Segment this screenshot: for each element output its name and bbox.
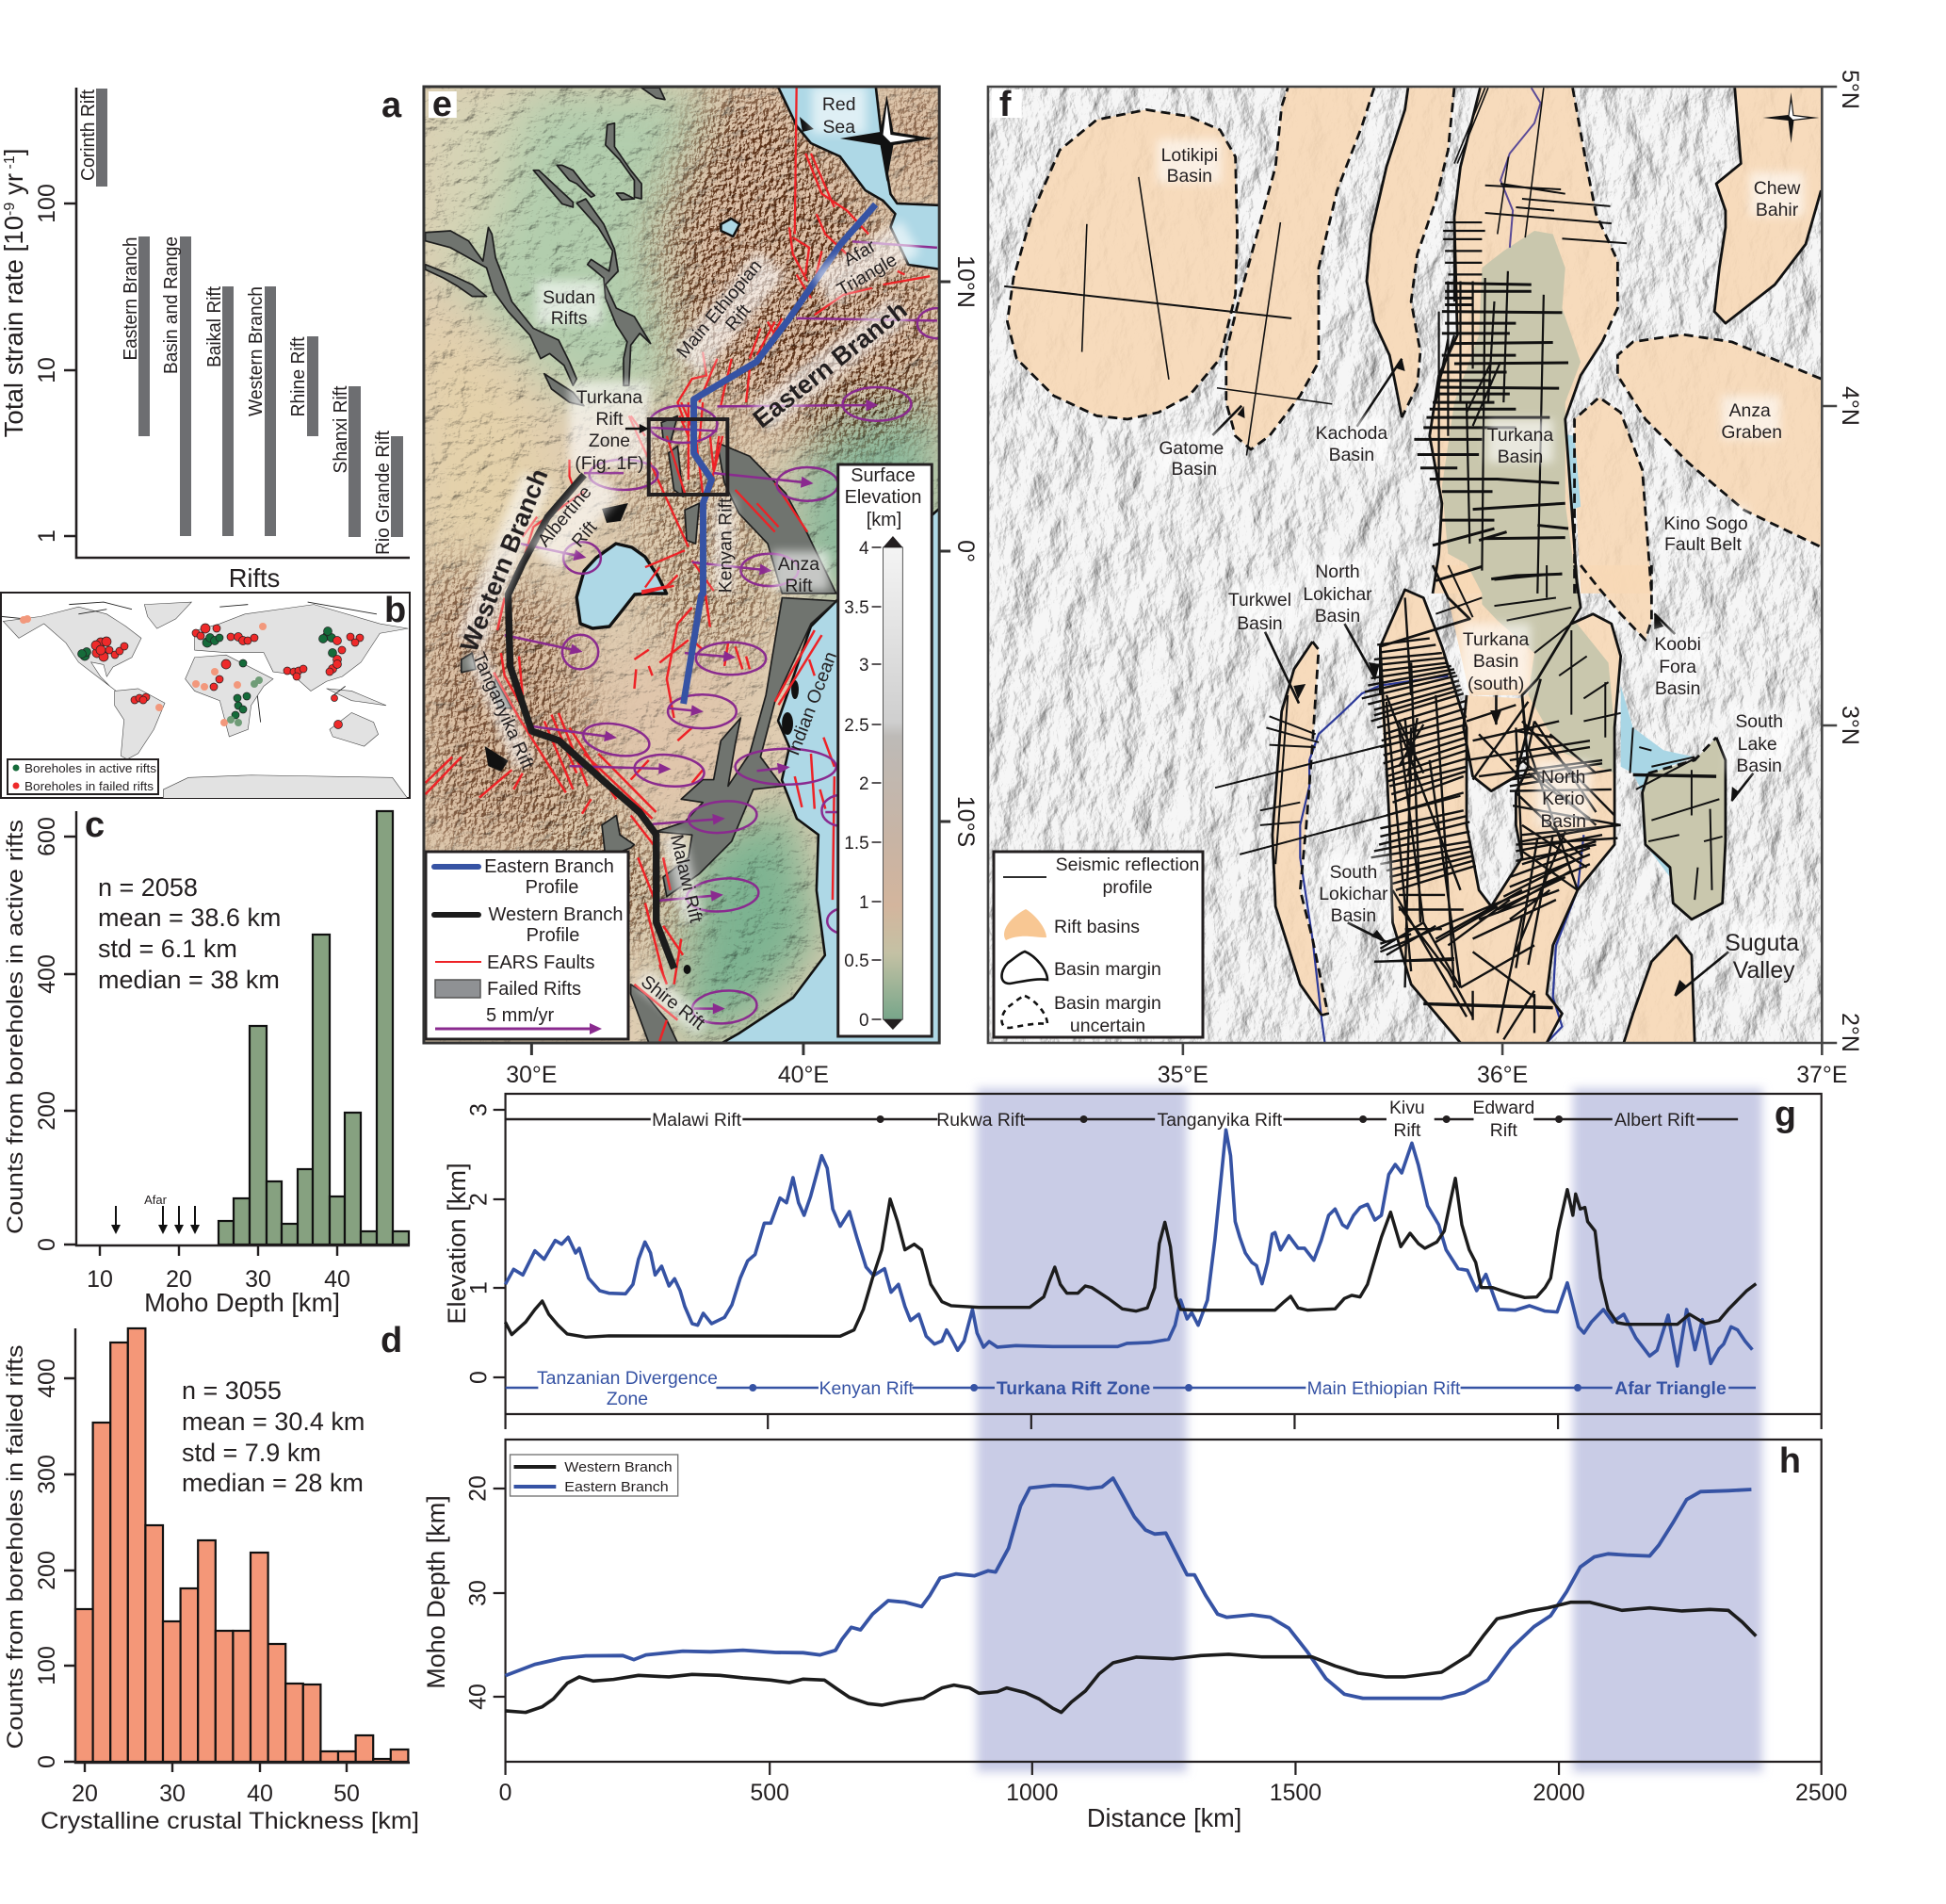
axes c [64,811,410,1256]
basin labels f: South [1735,711,1783,732]
tick labels h: 1000 [1006,1780,1058,1806]
map labels e: (Fig. 1F) [575,453,644,474]
map labels e: Main Ethiopian [673,256,766,363]
bar labels [78,90,394,555]
y axis label c: Counts from boreholes in active rifts [3,820,28,1234]
inset arrow [625,424,649,433]
stats d: n = 3055 [182,1376,282,1405]
eastern elevation curve [505,1130,1752,1366]
coordinate labels e: 10°N [952,255,979,308]
colorbar e: [km] [867,510,901,530]
basin labels f: Basin [1498,447,1543,467]
tick labels c: 400 [34,954,60,994]
y tick labels a: 1 [34,529,60,543]
seismic lines north [1004,88,1627,594]
stats c: mean = 38.6 km [98,903,281,932]
strain rate bars [96,89,403,537]
colorbar e: 3.5 [844,598,869,618]
water blue [1621,686,1695,877]
bold branch labels: Western Branch [455,464,554,656]
colorbar e: Elevation [845,487,921,508]
basin labels f: Turkana [1463,629,1530,650]
map labels e: Sudan [543,287,595,308]
black leader arrows f [1212,359,1753,996]
tick labels g: 1 [466,1281,493,1294]
legend h: Eastern Branch [564,1479,669,1495]
basin labels f: Basin [1172,459,1217,480]
basin labels f: Lake [1738,734,1777,755]
tick labels d: 100 [34,1646,60,1685]
tick labels g: 3 [466,1103,493,1116]
eastern rift segments: Afar Triangle [1614,1378,1727,1399]
panel d: histogram crustal thickness [3,1321,419,1834]
colorbar e [838,464,932,1036]
rift basins south [1273,565,1695,1043]
coordinate labels f [1158,70,1863,1088]
tick labels d: 300 [34,1455,60,1494]
stats d: mean = 30.4 km [182,1408,365,1436]
colorbar e: 1 [859,893,869,913]
inset box [649,419,727,495]
frame and ticks f [988,87,1837,1055]
basin labels f: Basin [1329,445,1374,465]
failed rifts lower [462,597,836,1043]
colorbar e: 3 [859,656,869,675]
map labels e: Turkana [576,387,642,408]
tick labels g: 2 [466,1193,493,1206]
basin labels f: Graben [1721,422,1782,443]
EARS faults lower [425,575,835,1041]
frame h [494,1440,1822,1775]
coordinate labels f: 36°E [1477,1062,1528,1088]
compass e [840,95,933,182]
legend f: uncertain [1070,1016,1145,1036]
y tick labels a: 100 [34,184,60,223]
coordinate labels e: 30°E [506,1062,557,1088]
frame and ticks e [424,87,950,1055]
basin labels f: Gatome [1159,438,1224,459]
panel a: strain rates [0,86,410,593]
basin labels f [1159,145,1801,926]
western rift segments [506,1098,1738,1141]
tick labels h [465,1475,1847,1806]
letter f: f [999,85,1012,124]
western rift segments: Kivu [1389,1098,1425,1118]
map labels halos e [456,87,920,1035]
eastern rift segments: Main Ethiopian Rift [1307,1378,1461,1399]
basin labels f: (south) [1468,674,1524,694]
legend f: Basin margin [1054,959,1161,980]
basin labels f: Basin [1473,651,1518,672]
basin labels f: Lokichar [1319,884,1388,904]
basin labels f: Lokichar [1303,584,1372,605]
Suguta label: Suguta [1725,930,1799,956]
map legend b: Boreholes in active rifts [24,761,157,775]
failed rifts upper [425,88,836,594]
colorbar e: 0 [859,1011,869,1031]
axes d [64,1328,410,1772]
tick labels h: 2000 [1532,1780,1585,1806]
legend f [994,852,1203,1037]
basin labels f: North [1315,561,1360,582]
legend f: profile [1102,877,1153,898]
colorbar e: 2 [859,774,869,794]
basin labels f: Turkana [1487,425,1553,446]
eastern moho curve [505,1478,1751,1699]
map labels e: Zone [589,431,630,451]
basin labels f: Chew [1754,178,1801,199]
hillshade base f [988,85,1822,1043]
panel b: world map [1,591,410,799]
western rift segments: Rukwa Rift [936,1110,1026,1131]
basin labels f: North [1541,767,1585,788]
EARS faults upper [519,88,930,594]
GPS arrows upper [521,241,957,586]
lakes [576,219,739,628]
western rift segments: Tanganyika Rift [1158,1110,1283,1131]
bar labels: Rhine Rift [288,336,309,416]
legend e: Profile [527,925,579,946]
basin labels f: Fora [1659,657,1696,677]
label halos f [1158,139,1804,978]
basin labels f: Koobi [1654,634,1701,655]
eastern rift segments: Turkana Rift Zone [997,1378,1150,1399]
tick labels h: 40 [465,1684,492,1710]
Eastern Branch profile line [684,204,876,704]
letter d: d [381,1321,402,1360]
legend f: Basin margin [1054,993,1161,1014]
colorbar e: 4 [859,539,869,559]
basin margins north [1007,88,1821,594]
map labels e: Malawi Rift [666,833,706,925]
tick labels c: 40 [324,1266,350,1293]
y axis label g: Elevation [km] [442,1163,471,1325]
basin labels f: Kino Sogo [1663,513,1748,534]
legend e: Profile [526,877,578,898]
borehole dots [20,615,364,729]
tick labels h: 1500 [1270,1780,1322,1806]
colorbar e: 1.5 [844,834,869,854]
basin labels f: Kachoda [1316,423,1387,444]
basin labels f: Basin [1736,756,1782,776]
map labels e: Shire Rift [637,971,709,1034]
letter b: b [384,591,406,630]
eastern rift segments [506,1368,1756,1409]
y axis label a: -1 [2,155,18,173]
basin labels f: Lotikipi [1161,145,1218,166]
coordinate labels f: 3°N [1837,706,1863,745]
water strip [1565,434,1581,510]
western moho curve [505,1603,1756,1713]
colorbar e: 0.5 [844,952,869,971]
basin labels f: Basin [1167,166,1212,187]
legend e: Western Branch [488,904,624,925]
legend h [511,1455,678,1496]
bar labels: Shanxi Rift [331,385,351,473]
Afar arrows: Afar [144,1193,168,1207]
continents [2,602,408,799]
coordinate labels e: 40°E [778,1062,829,1088]
bar labels: Corinth Rift [78,90,99,181]
colorbar e: 2.5 [844,716,869,736]
hillshade e [424,87,939,1043]
bar labels: Baikal Rift [204,286,225,367]
letter h: h [1779,1441,1801,1481]
tick labels d: 40 [247,1781,273,1807]
highlight band: Turkana Rift Zone [977,1088,1187,1772]
map labels e: Sea [822,117,855,138]
legend f: Seismic reflection [1056,854,1199,875]
tick labels g: 0 [466,1371,493,1384]
western rift segments: Rift [1490,1120,1517,1141]
x label c: Moho Depth [km] [144,1288,340,1317]
western rift segments: Malawi Rift [652,1110,742,1131]
legend e: EARS Faults [487,952,594,973]
basin labels f: Anza [1729,400,1771,421]
map labels e: Albertine [534,482,596,551]
map labels e: Rifts [551,308,588,329]
GPS arrows lower [505,635,863,1026]
tick labels c: 0 [34,1238,60,1251]
y axis label h: Moho Depth [km] [422,1495,450,1689]
tick labels d [34,1359,360,1807]
western elevation curve [505,1179,1756,1337]
coordinate labels f: 4°N [1837,386,1863,426]
bold branch labels [455,296,913,656]
legend e: Failed Rifts [487,979,581,1000]
legend f: Rift basins [1054,917,1140,937]
tick labels c: 30 [245,1266,271,1293]
letter c: c [85,806,105,845]
bar labels: Western Branch [246,286,267,416]
tick labels g [466,1103,493,1384]
map labels e: Red [822,94,856,115]
basin labels f: Bahir [1756,200,1799,220]
coordinate labels f: 35°E [1158,1062,1208,1088]
basin labels f: Basin [1541,811,1586,832]
basin labels f: Basin [1655,678,1700,699]
tick labels h: 20 [465,1475,492,1502]
stats d: std = 7.9 km [182,1439,321,1467]
map labels e: Rift [595,409,624,430]
tick labels d: 400 [34,1359,60,1398]
y axis label d: Counts from boreholes in failed rifts [3,1344,28,1749]
seas [717,85,941,1046]
basin labels f: Kerio [1542,789,1584,809]
stats c: n = 2058 [98,873,198,902]
basin margins south [1273,565,1726,1043]
highlight bands and profile panels [422,1088,1847,1832]
tick labels c: 20 [166,1266,192,1293]
bold branch labels: Eastern Branch [748,296,913,433]
compass f [1763,92,1819,143]
stats c [98,873,281,994]
tick labels c: 200 [34,1091,60,1131]
coordinate labels f: 37°E [1796,1062,1847,1088]
coordinate labels e: 10°S [952,796,979,847]
basin labels f: Fault Belt [1664,534,1743,555]
map labels e: Indian Ocean [783,649,841,758]
map labels e: Rift [785,576,813,596]
basin labels f: Basin [1315,606,1360,627]
map labels e: Kenyan Rift [715,497,736,593]
map labels e: Rift [568,516,602,551]
basin labels f: Basin [1237,613,1283,634]
map labels e: Anza [778,554,819,575]
lake Turkana south and lake south [1482,565,1726,919]
bars c [219,811,409,1245]
map labels e: Triangle [834,250,900,301]
bar labels: Basin and Range [161,236,182,374]
panel e: topographic map [424,85,957,1046]
western rift segments: Albert Rift [1614,1110,1695,1131]
panel f: Turkana map [988,85,1822,1043]
tick labels h: 2500 [1795,1780,1847,1806]
map labels e: Rift [722,300,755,334]
stats c: median = 38 km [98,966,280,994]
eastern rift segments: Zone [607,1389,648,1409]
letter f [992,85,1022,124]
chart axes a [64,88,410,558]
tick labels c: 10 [87,1266,113,1293]
map frame b [1,593,410,798]
letter e: e [432,85,452,124]
basin labels f: South [1330,862,1377,883]
basin labels f: Turkwel [1228,590,1291,610]
legend e: 5 mm/yr [486,1005,555,1026]
tick labels c: 600 [34,817,60,856]
tick labels d: 20 [72,1781,98,1807]
small black lakes [487,117,814,974]
tick labels h: 30 [465,1580,492,1606]
colorbar e: Surface [851,465,916,486]
highlight band: Afar Triangle [1573,1088,1762,1772]
western rift segments: Edward [1472,1098,1534,1118]
tick labels h: 500 [750,1780,789,1806]
Suguta label [1725,930,1799,984]
coordinate labels e: 0° [952,540,979,562]
letter g: g [1775,1095,1796,1134]
x label h: Distance [km] [1087,1803,1241,1832]
seismic lines south [1215,565,1723,1039]
bar labels: Rio Grande Rift [373,431,394,555]
tick labels c [34,817,350,1293]
tick labels d: 0 [34,1755,60,1768]
map legend b [8,759,158,794]
map legend b: Boreholes in failed rifts [24,779,154,793]
panel h: moho depth profile [422,1440,1847,1832]
panel g: elevation profile [442,1094,1822,1429]
frame g [494,1094,1822,1429]
Western Branch profile line [509,475,674,968]
tick labels h: 0 [499,1780,511,1806]
Afar arrows [111,1193,200,1234]
western rift segments: Rift [1393,1120,1421,1141]
y tick labels a: 10 [34,357,60,383]
x label d: Crystalline crustal Thickness [km] [41,1808,419,1834]
x axis label a: Rifts [229,563,280,593]
eastern rift segments: Tanzanian Divergence [537,1368,718,1389]
coordinate labels f: 2°N [1837,1013,1863,1052]
Suguta label: Valley [1733,957,1795,984]
legend h: Western Branch [564,1459,673,1475]
Omo river [1300,88,1583,1043]
tick labels d: 30 [159,1781,186,1807]
y tick labels a [34,184,60,543]
letter a: a [381,86,402,125]
terrain e [424,85,957,1046]
map labels e: Tanganyika Rift [468,649,538,773]
legend e [426,852,628,1039]
map labels e [468,94,900,1034]
stats d: median = 28 km [182,1469,364,1497]
y axis label a: -9 [2,203,18,216]
stats c: std = 6.1 km [98,935,237,963]
stats d [182,1376,365,1497]
legend e: Eastern Branch [484,856,614,877]
rugged relief e [424,87,939,1043]
rift basins north [1007,88,1821,594]
map labels e: Afar [840,236,880,270]
panel c: histogram moho depth [3,806,410,1317]
basin labels f: Basin [1331,905,1376,926]
coordinate labels f: 5°N [1837,70,1863,109]
lake Turkana north [1442,231,1581,594]
coordinate labels e [506,255,979,1088]
tick labels d: 200 [34,1551,60,1590]
tick labels d: 50 [333,1781,360,1807]
eastern rift segments: Kenyan Rift [819,1378,914,1399]
bar labels: Eastern Branch [121,237,141,360]
bars d [75,1328,408,1762]
